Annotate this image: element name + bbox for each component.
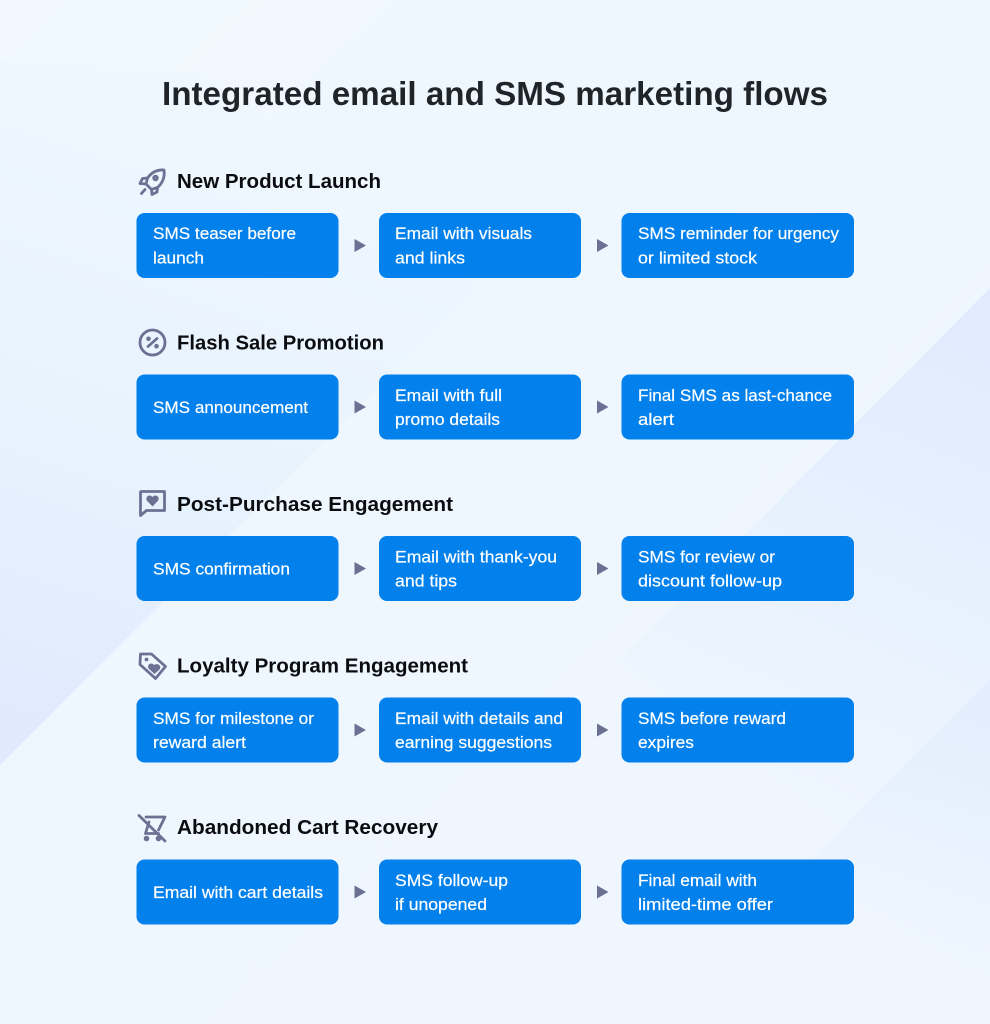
arrow (354, 724, 366, 736)
step 3: Final email with (638, 872, 757, 890)
step 3: Final SMS as last-chance (638, 387, 832, 405)
step 1 (136, 860, 338, 924)
arrow (597, 562, 608, 575)
step 1: SMS teaser before (153, 225, 296, 243)
step 3: alert (638, 411, 674, 429)
step 3: SMS for review or (638, 548, 776, 566)
heading: Abandoned Cart Recovery (177, 816, 439, 839)
step 2: Email with visuals (395, 225, 532, 243)
heading: New Product Launch (177, 170, 381, 193)
step 1 (136, 698, 338, 762)
step 2: earning suggestions (395, 734, 552, 752)
step 3: SMS reminder for urgency (638, 225, 840, 243)
arrow (597, 239, 608, 252)
step 2 (379, 374, 581, 440)
step 1 (136, 213, 338, 278)
step 3: SMS before reward (638, 710, 786, 728)
section: Loyalty Program Engagement (136, 654, 854, 762)
arrow (597, 724, 608, 736)
step 1: reward alert (153, 734, 246, 752)
heading: Post-Purchase Engagement (177, 493, 453, 516)
step 3 (622, 213, 854, 278)
icon: chat heart (140, 492, 164, 516)
arrow (354, 239, 366, 252)
step 1 (136, 374, 338, 440)
arrow (354, 562, 366, 575)
arrow (597, 400, 608, 414)
step 2: and tips (395, 572, 457, 590)
icon: tag heart (140, 654, 166, 678)
step 2 (379, 698, 581, 762)
step 2: Email with thank-you (395, 548, 557, 566)
section: Abandoned Cart Recovery (136, 816, 854, 924)
step 2: and links (395, 250, 465, 268)
step 3 (622, 536, 854, 601)
icon: rocket (140, 170, 164, 194)
heading: Flash Sale Promotion (177, 332, 384, 354)
step 1: SMS for milestone or (153, 710, 315, 728)
step 3 (622, 698, 854, 762)
step 2: SMS follow-up (395, 872, 508, 890)
step 3: limited-time offer (638, 896, 774, 914)
section: Post-Purchase Engagement (136, 492, 854, 601)
step 3: or limited stock (638, 250, 758, 268)
step 3 (622, 860, 854, 924)
step 1: Email with cart details (153, 884, 323, 902)
arrow (354, 886, 366, 898)
step 1 (136, 536, 338, 601)
step 2 (379, 860, 581, 924)
step 1: launch (153, 250, 204, 268)
step 1: SMS confirmation (153, 560, 290, 578)
section: New Product Launch (136, 170, 854, 278)
step 1: SMS announcement (153, 399, 308, 417)
icon: percent circle (140, 330, 165, 355)
step 2: Email with full (395, 387, 502, 405)
heading: Loyalty Program Engagement (177, 654, 468, 678)
step 3 (622, 374, 854, 440)
step 2: if unopened (395, 896, 487, 914)
arrow (354, 400, 366, 414)
step 2: Email with details and (395, 710, 563, 728)
icon: crossed cart (139, 816, 165, 841)
step 2: promo details (395, 411, 500, 429)
step 2 (379, 536, 581, 601)
title: Integrated email and SMS marketing flows (162, 76, 828, 113)
section: Flash Sale Promotion (136, 330, 854, 440)
step 3: expires (638, 734, 694, 752)
arrow (597, 886, 608, 898)
step 2 (379, 213, 581, 278)
step 3: discount follow-up (638, 572, 782, 590)
